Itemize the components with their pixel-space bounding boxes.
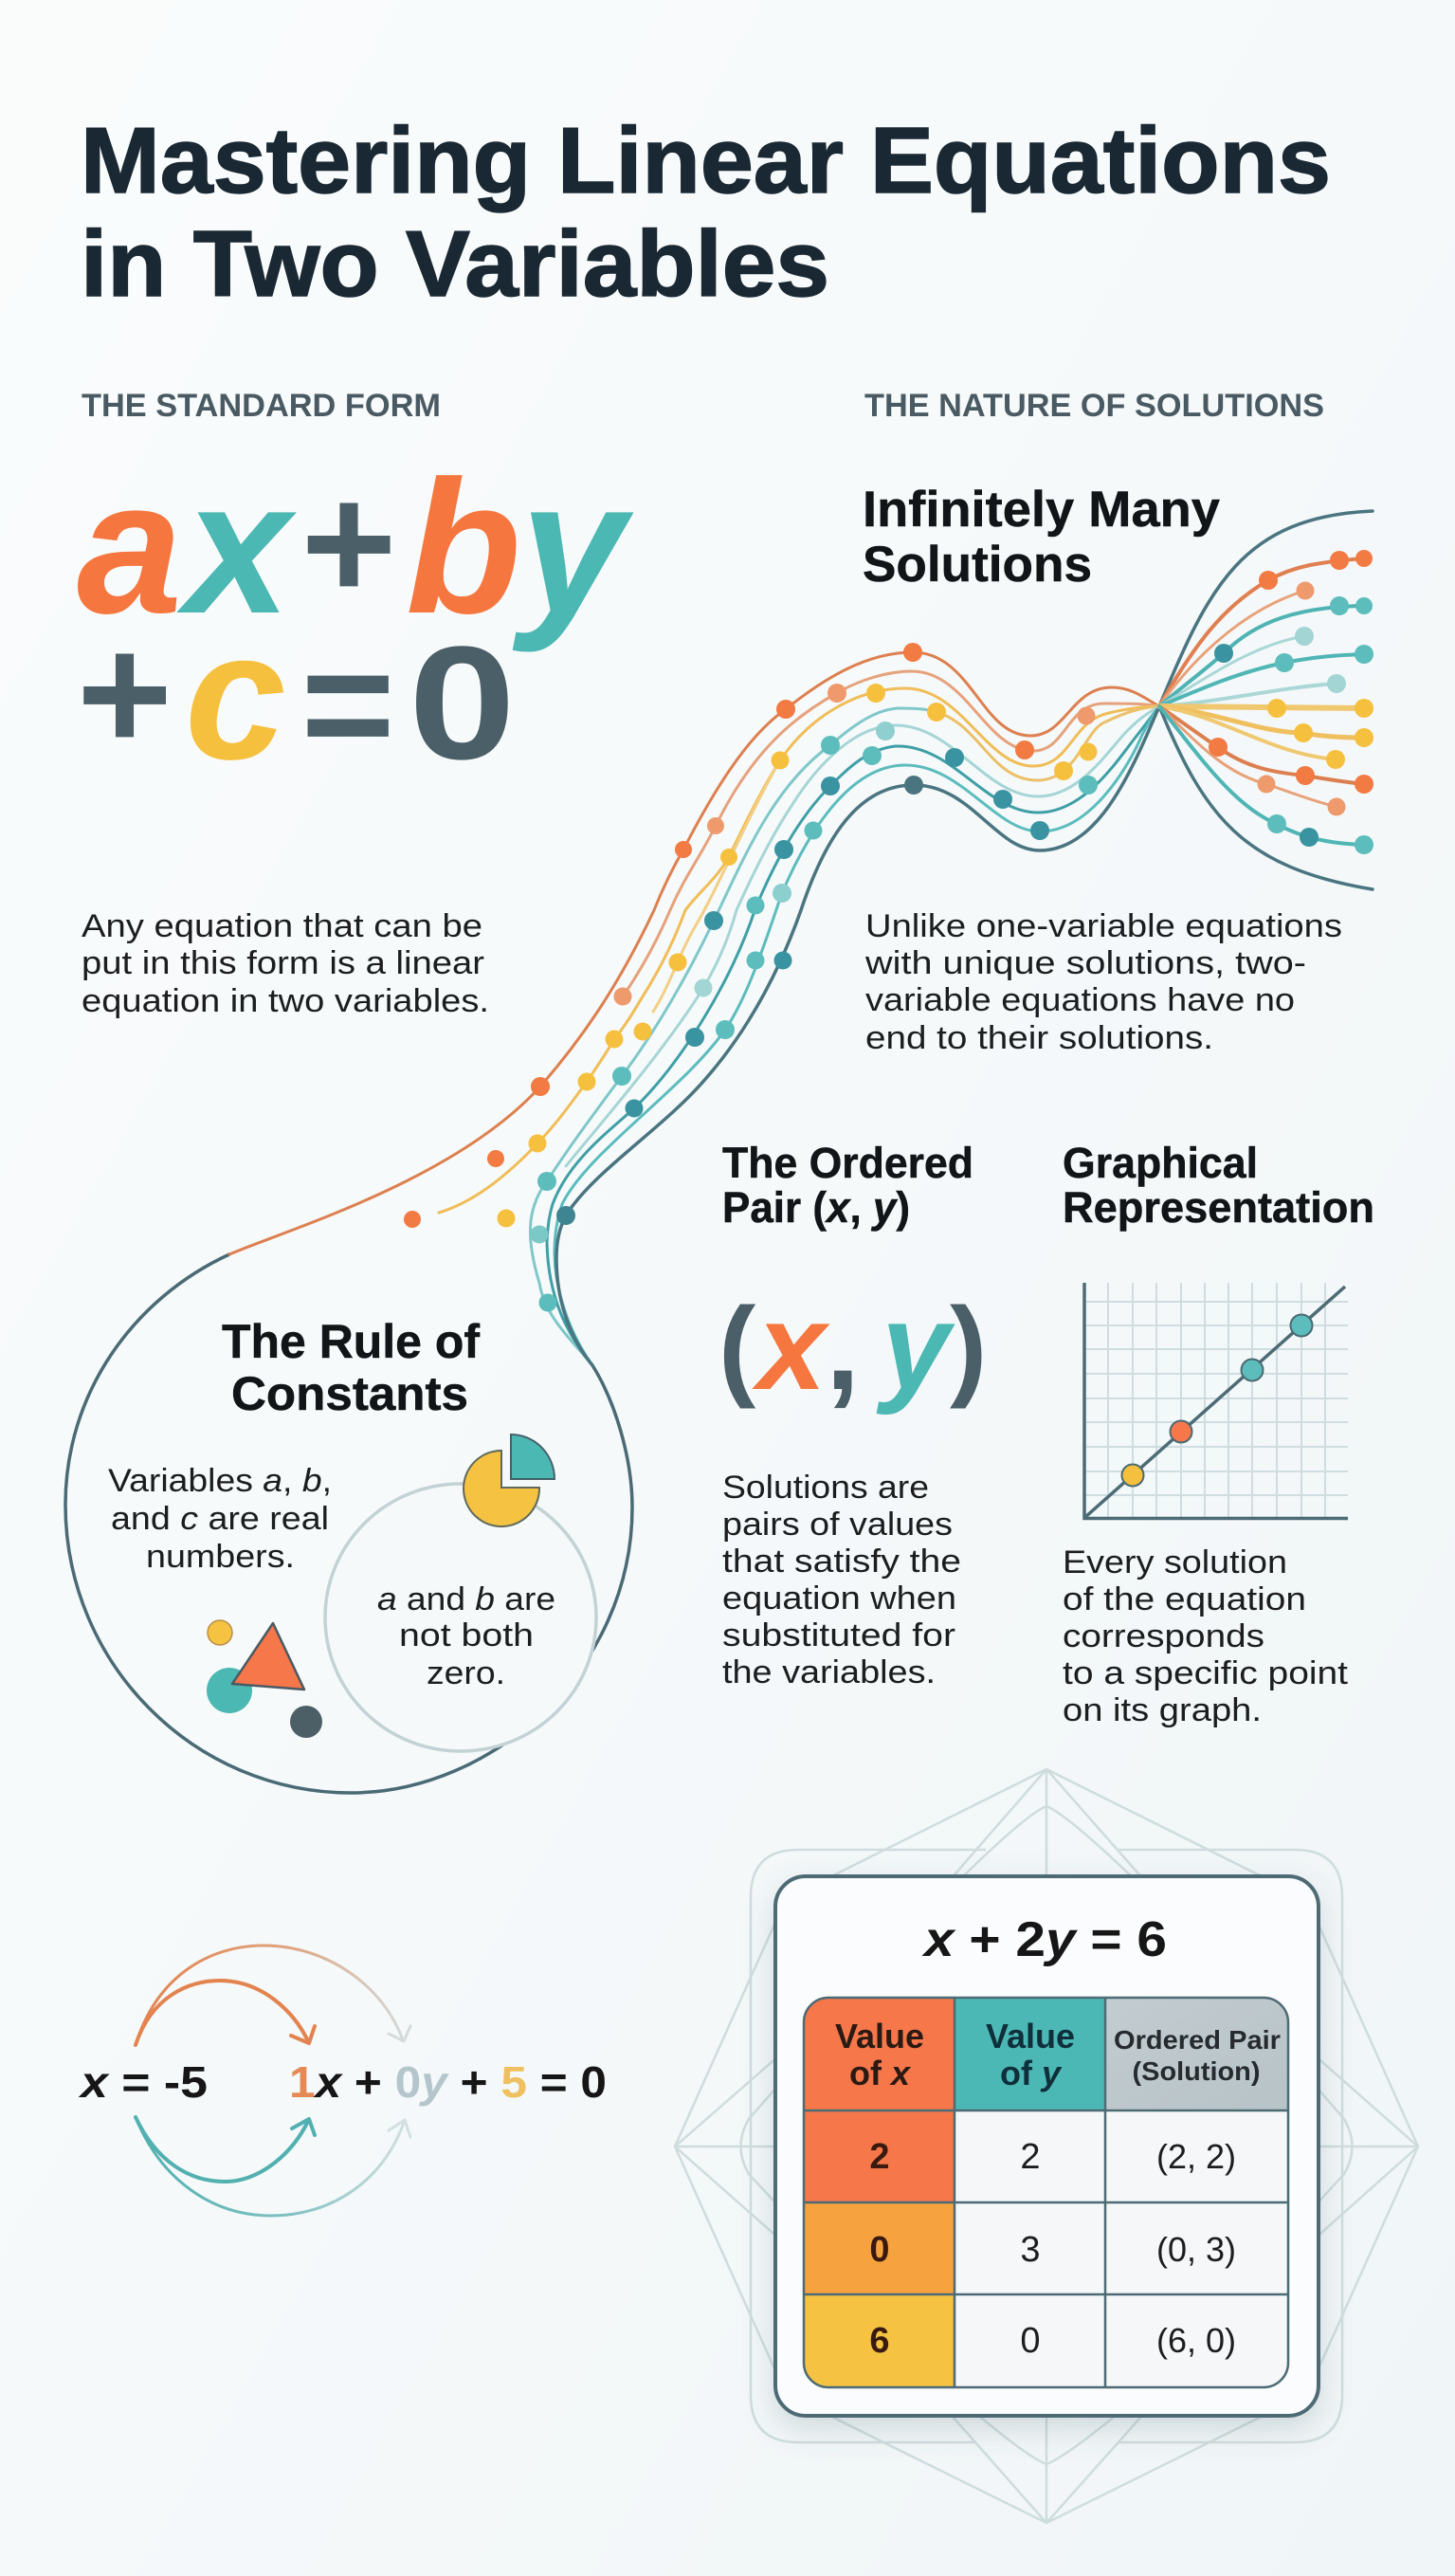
heading: the nature of solutions: THE NATURE OF SOLUTIONS — [864, 388, 1324, 424]
heading: the standard form: THE STANDARD FORM — [82, 388, 441, 424]
text: graphical representation description: on its graph. — [1063, 1692, 1262, 1728]
text: variables are real numbers: and c are real — [111, 1501, 329, 1537]
text: variables are real numbers: numbers. — [146, 1539, 295, 1575]
text: nature of solutions description — [864, 908, 1342, 1056]
heading: the ordered pair: The Ordered — [722, 1139, 973, 1187]
card — [775, 1876, 1319, 2416]
text: nature of solutions description: end to their solutions. — [865, 1020, 1213, 1056]
panel: the rule of constants bulb — [65, 1254, 632, 1793]
row values: ordered pairs: (2, 2) — [1156, 2137, 1236, 2176]
icon: pie chart — [464, 1434, 555, 1526]
decorative geometric star behind table — [675, 1769, 1418, 2523]
row values: ordered pairs — [1156, 2137, 1236, 2360]
heading: the rule of constants — [222, 1315, 480, 1420]
formula: ax + by + c = 0: = — [301, 614, 395, 795]
row values: x: 0 — [869, 2230, 890, 2270]
table cells — [804, 1998, 1288, 2387]
heading: infinitely many solutions: Infinitely Many — [863, 482, 1221, 538]
inner circle — [325, 1484, 596, 1751]
formula: ax + by + c = 0 — [77, 442, 634, 797]
column header: value of y — [986, 2017, 1075, 2092]
text: variables are real numbers: Variables a, b, — [108, 1463, 332, 1499]
diagram: conversion of x = -5 to standard form — [78, 1946, 607, 2216]
points — [1122, 1314, 1312, 1487]
column header: ordered pair — [1114, 2025, 1281, 2086]
axes — [1084, 1283, 1348, 1519]
text: graphical representation description — [1063, 1544, 1349, 1728]
row values: ordered pairs: (6, 0) — [1156, 2321, 1236, 2360]
row values: ordered pairs: (0, 3) — [1156, 2230, 1236, 2269]
heading: the rule of constants: The Rule of — [222, 1315, 480, 1368]
title: in Two Variables — [81, 211, 829, 316]
text: standard form description — [82, 908, 489, 1019]
text: a and b are not both zero: zero. — [427, 1655, 505, 1691]
text: a and b are not both zero: not both — [399, 1617, 534, 1653]
text: ordered pair description: equation when — [722, 1580, 956, 1617]
heading: infinitely many solutions: Solutions — [863, 537, 1092, 593]
title: Mastering Linear Equations — [81, 108, 1331, 212]
heading: graphical representation — [1063, 1139, 1374, 1232]
chart: line graph with solution points — [1084, 1283, 1348, 1519]
column header: value of y: Value — [986, 2017, 1075, 2055]
grid — [1084, 1283, 1348, 1518]
chart: bundle of solution curves — [229, 511, 1373, 1365]
heading: the rule of constants: Constants — [231, 1367, 468, 1420]
row values: x: 6 — [869, 2321, 890, 2361]
arrows: bottom teal — [136, 2117, 410, 2216]
text: ordered pair description: substituted for — [722, 1617, 955, 1653]
heading: infinitely many solutions — [863, 482, 1221, 593]
solution dots: light teal — [531, 627, 1346, 1244]
formula: ordered pair (x, y) — [718, 1277, 987, 1416]
row values: x — [869, 2137, 890, 2361]
row values: x: 2 — [869, 2137, 890, 2177]
solution dots: yellow — [497, 684, 1373, 1227]
text: variables are real numbers — [108, 1463, 332, 1575]
formula: ordered pair (x, y): ) — [950, 1285, 987, 1410]
column header: ordered pair: Ordered Pair — [1114, 2025, 1281, 2055]
solution dots: dark teal — [556, 644, 1319, 1225]
formula: ax + by + c = 0: + — [301, 450, 397, 634]
heading: the ordered pair: Pair (x, y) — [722, 1183, 910, 1232]
text: graphical representation description: to a specific point — [1063, 1655, 1349, 1691]
table — [804, 1998, 1288, 2387]
text: ordered pair description: the variables. — [722, 1654, 936, 1690]
formula: ax + by + c = 0: c — [185, 594, 286, 797]
row values: y: 0 — [1020, 2321, 1041, 2361]
column header: value of x — [835, 2017, 924, 2092]
formula: ax + by + c = 0: y — [512, 442, 634, 653]
text: a and b are not both zero: a and b are — [377, 1581, 555, 1617]
column header: value of x: of x — [849, 2054, 912, 2092]
column header: value of x: Value — [835, 2017, 924, 2055]
text: ordered pair description: that satisfy the — [722, 1544, 961, 1580]
row values: y: 2 — [1020, 2137, 1041, 2177]
formula: ordered pair (x, y): ( — [718, 1285, 756, 1410]
row values: y — [1020, 2137, 1041, 2361]
text: ordered pair description: pairs of values — [722, 1507, 953, 1543]
icon: shapes — [207, 1620, 322, 1738]
text: nature of solutions description: with unique solutions, two- — [864, 945, 1306, 981]
heading: graphical representation: Graphical — [1063, 1139, 1258, 1187]
text: nature of solutions description: variable equations have no — [865, 982, 1295, 1018]
formula: ax + by + c = 0: b — [406, 442, 521, 653]
formula: ordered pair (x, y): , — [826, 1277, 860, 1416]
text: graphical representation description: of the equation — [1063, 1581, 1306, 1617]
formula: ordered pair (x, y): y — [876, 1277, 955, 1416]
column header: value of y: of y — [1000, 2054, 1063, 2092]
formula: ax + by + c = 0: 0 — [409, 613, 516, 794]
equation: x = -5: x = -5 — [78, 2057, 208, 2107]
line — [1084, 1287, 1345, 1518]
heading: graphical representation: Representation — [1063, 1183, 1374, 1232]
heading: the ordered pair — [722, 1139, 973, 1232]
text: standard form description: Any equation that can be — [82, 908, 482, 944]
solution dots: teal — [537, 596, 1373, 1312]
title — [81, 108, 1331, 316]
text: standard form description: put in this form is a linear — [82, 945, 484, 981]
bulb outline — [65, 1254, 632, 1793]
solution dots: light orange — [614, 582, 1346, 1005]
curve lines: fanning out — [1159, 558, 1373, 889]
panel: solutions table card — [775, 1876, 1319, 2416]
equation heading: x + 2y = 6 — [921, 1912, 1167, 1967]
formula: ordered pair (x, y): x — [752, 1277, 830, 1416]
curve lines: converging bundle — [229, 511, 1373, 1365]
text: ordered pair description: Solutions are — [722, 1470, 929, 1506]
solution dots: orange — [404, 550, 1373, 1228]
text: ordered pair description — [722, 1470, 961, 1690]
column header: ordered pair: (Solution) — [1132, 2056, 1261, 2086]
formula: ax + by + c = 0: a — [77, 442, 182, 653]
equation: 1x + 0y + 5 = 0: 1x + 0y + 5 = 0 — [289, 2057, 607, 2107]
text: nature of solutions description: Unlike one-variable equations — [865, 908, 1342, 944]
arrows: top orange — [136, 1946, 410, 2045]
row values: y: 3 — [1020, 2230, 1041, 2270]
text: graphical representation description: corresponds — [1063, 1618, 1264, 1654]
formula: ax + by + c = 0: + — [77, 601, 173, 785]
formula: ax + by + c = 0: x — [176, 442, 297, 653]
text: a and b are not both zero — [377, 1581, 555, 1691]
text: graphical representation description: Every solution — [1063, 1544, 1287, 1580]
text: standard form description: equation in two variables. — [82, 983, 489, 1019]
